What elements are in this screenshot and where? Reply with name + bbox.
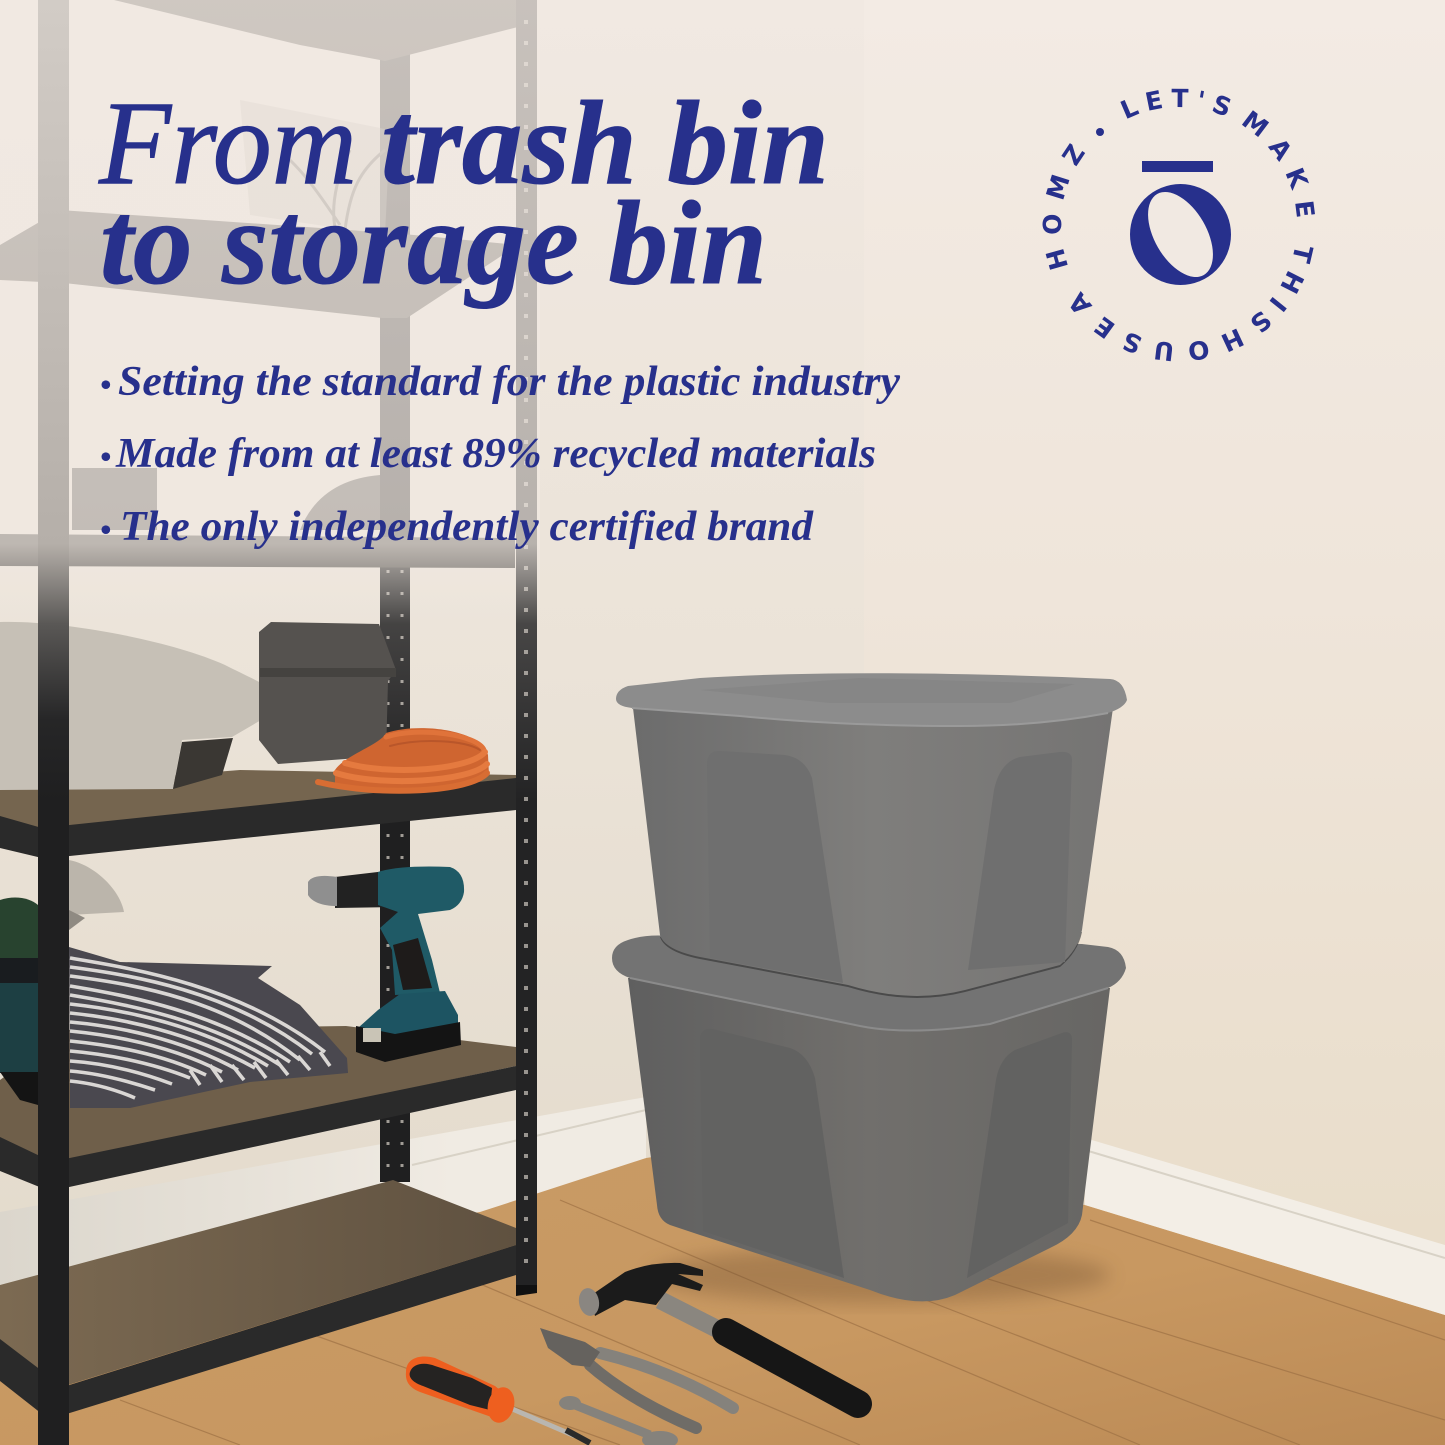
tagline word LET'S: LET'S xyxy=(1120,88,1230,119)
tagline word HOUSE: HOUSE xyxy=(1094,316,1244,362)
pliers xyxy=(540,1328,733,1428)
fade overlay xyxy=(0,0,540,800)
top shelf xyxy=(114,0,520,61)
floor shadow xyxy=(650,1247,1110,1303)
tagline word THIS: THIS xyxy=(1252,247,1314,332)
bullet 2: Made from at least 89% recycled materials xyxy=(115,431,876,477)
bullet 3: The only independently certified brand xyxy=(120,504,814,550)
bullet 3: • xyxy=(100,511,111,547)
grey bowl behind xyxy=(69,860,124,915)
title: From xyxy=(98,76,357,209)
storage box xyxy=(259,622,396,764)
logo mark bar xyxy=(1142,161,1213,172)
screwdriver xyxy=(406,1357,590,1443)
left wall xyxy=(0,0,864,1320)
upper storage bin xyxy=(616,673,1127,996)
lower storage bin xyxy=(612,932,1126,1301)
baseboard right xyxy=(1085,1138,1445,1315)
right post holes xyxy=(524,20,528,1280)
hammer xyxy=(577,1263,858,1404)
logo mark hole xyxy=(1135,181,1226,288)
plant on upper shelf xyxy=(290,150,385,230)
striped blanket xyxy=(69,947,348,1108)
teal bowl and plant xyxy=(0,898,38,1105)
faded objects on shelf xyxy=(72,468,157,530)
wood floor xyxy=(0,1150,1445,1445)
shelf 1 xyxy=(0,770,516,858)
pillow xyxy=(0,622,282,790)
back post xyxy=(380,0,410,1182)
front post xyxy=(38,0,69,1445)
orange hose xyxy=(318,728,489,793)
shelf 3 xyxy=(0,1180,516,1416)
tagline dot xyxy=(1096,128,1104,136)
baseboard left xyxy=(0,1097,646,1285)
logo mark ring xyxy=(1130,184,1231,285)
tagline word A: A xyxy=(1070,291,1092,312)
middle upper shelf xyxy=(0,534,515,568)
title: trash bin xyxy=(381,76,829,209)
title xyxy=(98,76,829,309)
tagline word MAKE: MAKE xyxy=(1242,110,1315,217)
bullet 1: • xyxy=(100,366,111,402)
shelf 2 xyxy=(0,1026,516,1189)
tagline word HOMZ: HOMZ xyxy=(1042,143,1086,270)
title: to storage bin xyxy=(100,176,767,309)
wrench xyxy=(559,1396,678,1445)
upper shelf xyxy=(0,210,518,318)
logo badge xyxy=(1042,88,1315,362)
bullet 1: Setting the standard for the plastic industry xyxy=(118,359,900,405)
drill xyxy=(308,867,464,1062)
bullet 2: • xyxy=(100,438,111,474)
right post xyxy=(516,0,537,1285)
shelving unit xyxy=(0,0,537,1296)
right wall xyxy=(864,0,1445,1320)
bullet list xyxy=(100,359,900,550)
